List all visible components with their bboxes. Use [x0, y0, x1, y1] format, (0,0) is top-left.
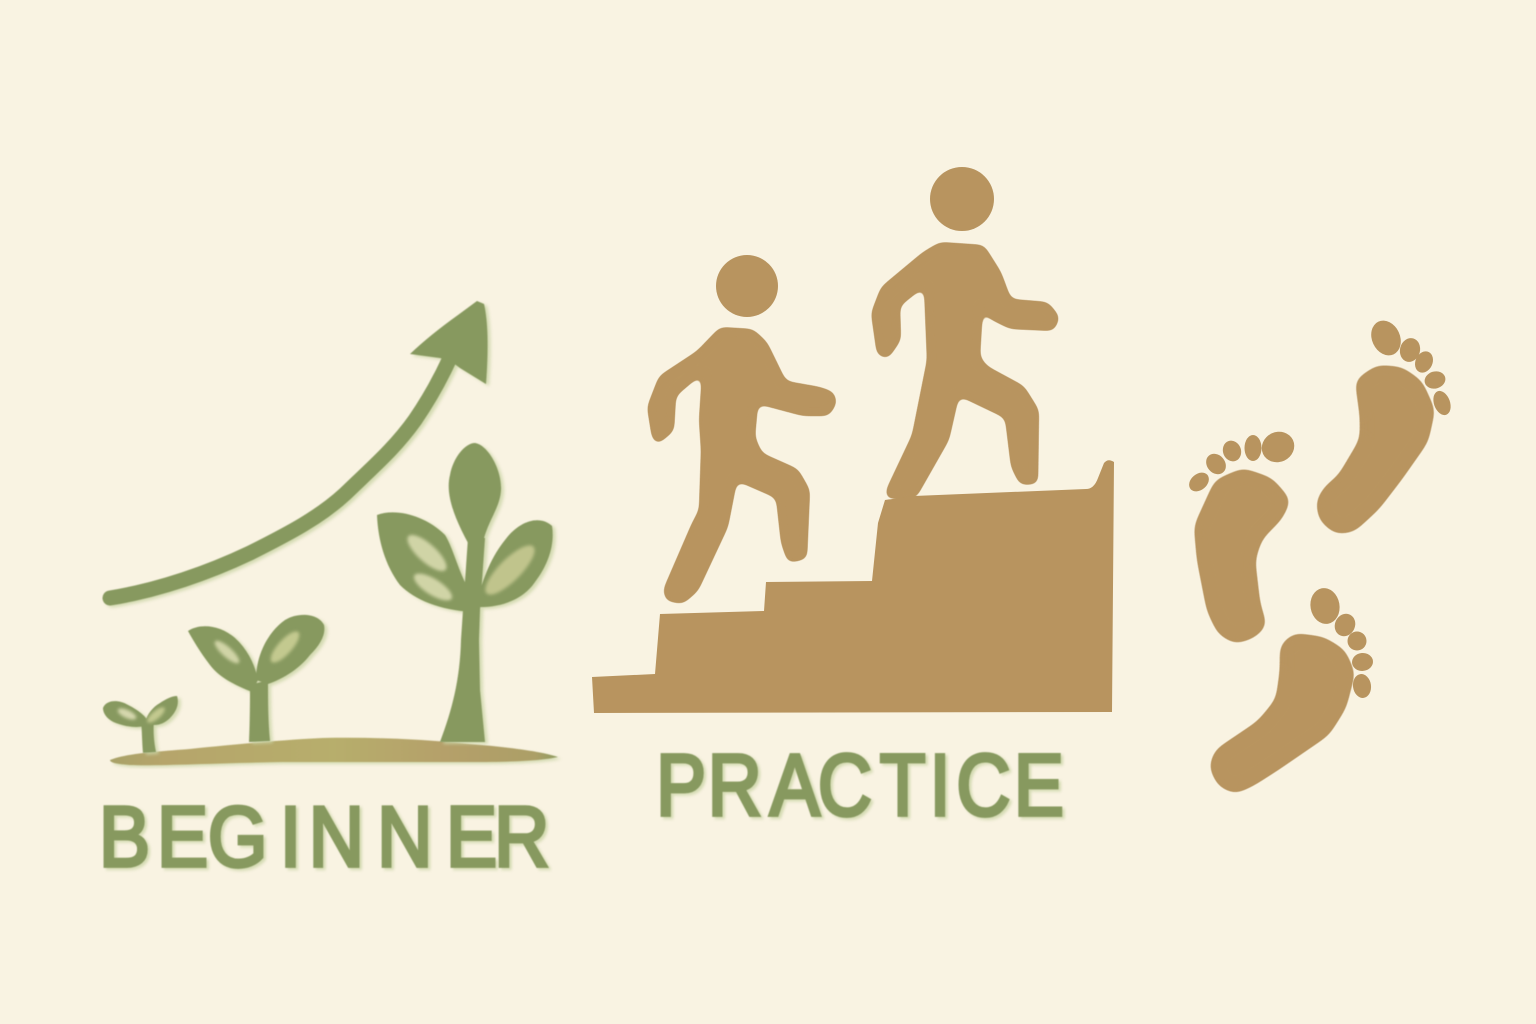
icon: person lower step	[647, 255, 837, 604]
icon: medium seedling	[188, 615, 324, 742]
heading: beginner: BEGINNER	[99, 790, 549, 885]
arrow: growth curve	[110, 301, 488, 598]
panel: footprints	[1185, 316, 1454, 794]
icon: lower footprint	[1209, 586, 1374, 794]
icon: soil mound	[110, 738, 558, 765]
panel: practice	[592, 167, 1114, 834]
icon: small sprout	[103, 696, 178, 753]
icon: upper right footprint	[1316, 316, 1454, 534]
icon: left footprint	[1185, 426, 1299, 644]
heading: practice: PRACTICE	[656, 738, 1064, 834]
icon: person upper step	[871, 167, 1060, 499]
icon: tall plant	[377, 443, 553, 742]
icon: staircase	[592, 460, 1114, 713]
panel: beginner	[99, 301, 558, 885]
